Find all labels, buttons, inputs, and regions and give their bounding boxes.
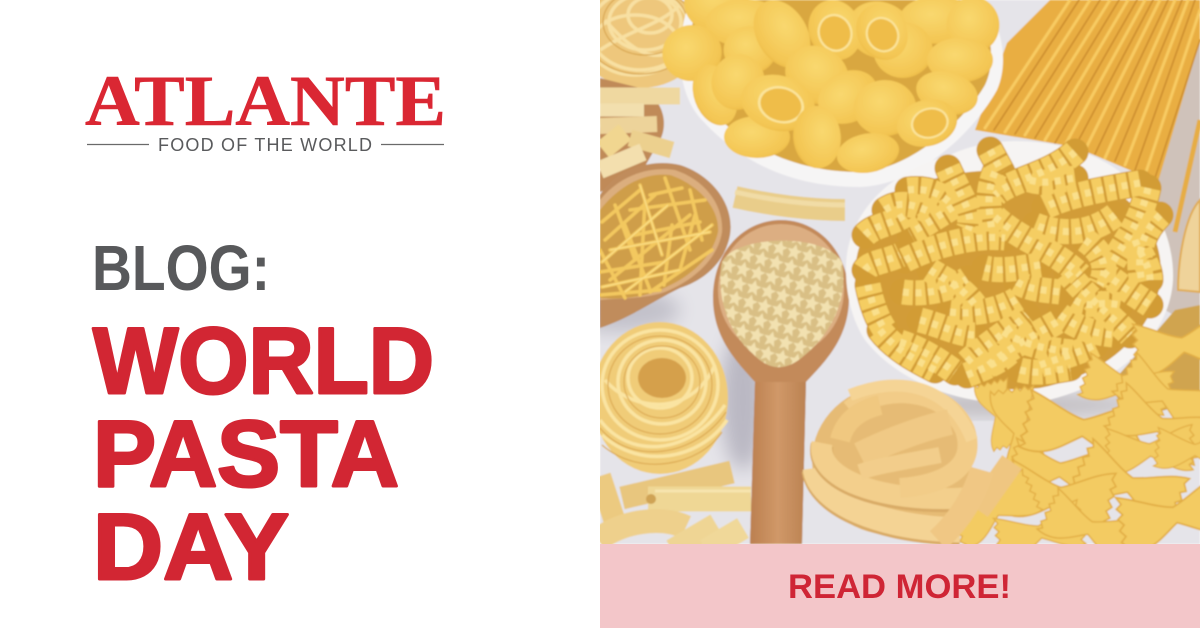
photo background bbox=[600, 0, 1200, 544]
logo tagline: FOOD OF THE WORLD bbox=[158, 135, 372, 155]
top left tagliolini nest bbox=[600, 0, 687, 88]
large bowl with fusilli bbox=[846, 141, 1173, 415]
logo wordmark: ATLANTE bbox=[85, 61, 446, 141]
farfalle bow ties bbox=[959, 304, 1200, 544]
top bowl bbox=[658, 0, 1003, 187]
spaghetti bundle bbox=[975, 0, 1200, 232]
small wooden bowl with vermicelli bbox=[600, 162, 732, 338]
lower left tagliolini nest bbox=[592, 322, 728, 474]
cream pasta at right edge bbox=[1178, 200, 1200, 292]
panel: read more bar bbox=[600, 544, 1200, 628]
wooden spoon with star pasta bbox=[713, 220, 849, 544]
logo bbox=[85, 61, 446, 155]
tagliatelle nest bbox=[812, 385, 1012, 540]
panel: left branding and headline bbox=[85, 61, 446, 599]
fusilli bbox=[865, 150, 1160, 375]
shells bbox=[658, 0, 999, 178]
button label: READ MORE! bbox=[788, 568, 1011, 606]
bottom left penne bbox=[598, 472, 751, 550]
blog label: BLOG: bbox=[92, 232, 270, 304]
headline: PASTA bbox=[93, 401, 399, 506]
rigatone tube bbox=[735, 192, 845, 210]
taupe shadow behind spaghetti bbox=[1158, 43, 1200, 314]
headline: DAY bbox=[93, 494, 289, 599]
short penne pieces bbox=[600, 96, 680, 170]
headline bbox=[93, 308, 434, 599]
headline: WORLD bbox=[93, 308, 434, 413]
wood behind short penne bbox=[600, 78, 664, 192]
panel: pasta photo illustration bbox=[600, 0, 1200, 544]
